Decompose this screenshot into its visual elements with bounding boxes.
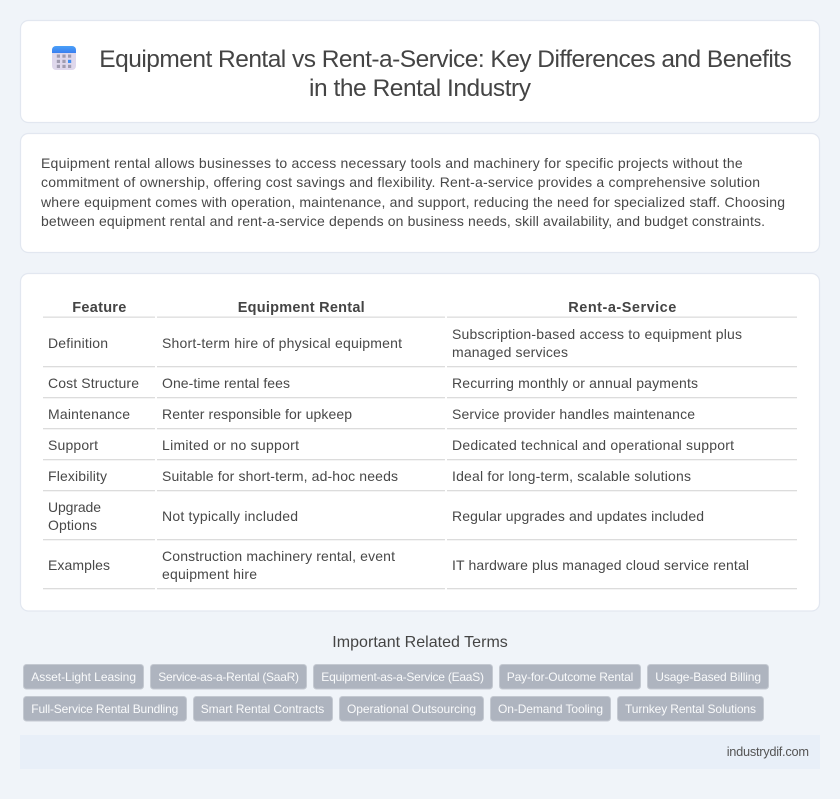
- intro paragraph: where equipment comes with operation, maintenance, and support, reducing the need for specialized staff. Choosing: [40, 194, 785, 210]
- tag: service-as-a-rental: Service-as-a-Rental (SaaR): [158, 670, 299, 684]
- row: support: Support: [48, 437, 98, 453]
- table header row: [43, 300, 797, 318]
- footer bar: [20, 735, 820, 769]
- tag: usage-based billing: Usage-Based Billing: [655, 670, 761, 684]
- title: in the Rental Industry: [309, 75, 532, 102]
- row: maintenance: Renter responsible for upkeep: [162, 406, 352, 422]
- row: examples: Examples: [48, 557, 110, 573]
- row: support: [43, 437, 797, 460]
- row: definition: managed services: [452, 344, 568, 360]
- tag: operational outsourcing: [340, 696, 484, 721]
- table header row: Rent-a-Service: [568, 300, 676, 316]
- row: upgrade options: Regular upgrades and updates included: [452, 508, 704, 524]
- icon: calendar: [52, 46, 76, 70]
- row: cost structure: One-time rental fees: [162, 375, 290, 391]
- related term tags: [24, 664, 768, 721]
- row: cost structure: Cost Structure: [48, 375, 139, 391]
- row: flexibility: [43, 468, 797, 491]
- tag: service-as-a-rental: [150, 664, 306, 689]
- row: definition: Definition: [48, 335, 108, 351]
- panel: comparison table: [20, 274, 820, 611]
- row: maintenance: Maintenance: [48, 406, 130, 422]
- tag: turnkey rental solutions: Turnkey Rental Solutions: [625, 702, 756, 716]
- row: definition: Subscription-based access to equipment plus: [452, 326, 742, 342]
- row: flexibility: Ideal for long-term, scalable solutions: [452, 468, 691, 484]
- row: examples: [43, 548, 797, 589]
- tag: usage-based billing: [648, 664, 768, 689]
- intro paragraph: Equipment rental allows businesses to access necessary tools and machinery for specific projects without the: [41, 155, 743, 171]
- row: support: Limited or no support: [162, 437, 299, 453]
- tag: pay-for-outcome rental: Pay-for-Outcome Rental: [507, 670, 633, 684]
- footer bar: industrydif.com: [727, 744, 809, 759]
- table header row: Feature: [72, 300, 126, 316]
- row: examples: Construction machinery rental, event: [162, 548, 395, 564]
- row: flexibility: Suitable for short-term, ad-hoc needs: [162, 468, 398, 484]
- table header row: Equipment Rental: [238, 300, 365, 316]
- title: Equipment Rental vs Rent-a-Service: Key Differences and Benefits: [99, 46, 792, 73]
- row: flexibility: Flexibility: [48, 468, 107, 484]
- row: maintenance: Service provider handles maintenance: [452, 406, 695, 422]
- tag: smart rental contracts: [194, 696, 332, 721]
- tag: equipment-as-a-service: Equipment-as-a-Service (EaaS): [321, 670, 484, 684]
- tag: turnkey rental solutions: [618, 696, 764, 721]
- title: [99, 46, 792, 102]
- row: examples: equipment hire: [162, 566, 257, 582]
- row: cost structure: [43, 375, 797, 398]
- row: support: Dedicated technical and operational support: [452, 437, 734, 453]
- row: definition: [43, 326, 797, 367]
- panel: header: [20, 20, 820, 122]
- tag: asset-light leasing: Asset-Light Leasing: [31, 670, 136, 684]
- row: upgrade options: Not typically included: [162, 508, 298, 524]
- tag: smart rental contracts: Smart Rental Contracts: [201, 702, 324, 716]
- row: upgrade options: Upgrade: [48, 499, 101, 515]
- tag: on-demand tooling: On-Demand Tooling: [498, 702, 603, 716]
- row: examples: IT hardware plus managed cloud service rental: [452, 557, 749, 573]
- tag: full-service rental bundling: Full-Service Rental Bundling: [31, 702, 178, 716]
- tag: on-demand tooling: [490, 696, 610, 721]
- intro paragraph: between equipment rental and rent-a-service depends on business needs, skill availability, and budget constraints.: [41, 213, 765, 229]
- intro paragraph: [40, 155, 785, 229]
- heading: important related terms: Important Related Terms: [332, 634, 508, 651]
- panel: intro text: [20, 134, 820, 252]
- row: upgrade options: Options: [48, 517, 97, 533]
- tag: asset-light leasing: [24, 664, 144, 689]
- row: upgrade options: [43, 499, 797, 540]
- intro paragraph: commitment of ownership, offering cost savings and flexibility. Rent-a-service provides a comprehensive solution: [41, 174, 760, 190]
- row: definition: Short-term hire of physical equipment: [162, 335, 402, 351]
- tag: equipment-as-a-service: [314, 664, 492, 689]
- row: cost structure: Recurring monthly or annual payments: [452, 375, 698, 391]
- tag: operational outsourcing: Operational Outsourcing: [347, 702, 476, 716]
- tag: full-service rental bundling: [24, 696, 186, 721]
- tag: pay-for-outcome rental: [500, 664, 640, 689]
- row: maintenance: [43, 406, 797, 429]
